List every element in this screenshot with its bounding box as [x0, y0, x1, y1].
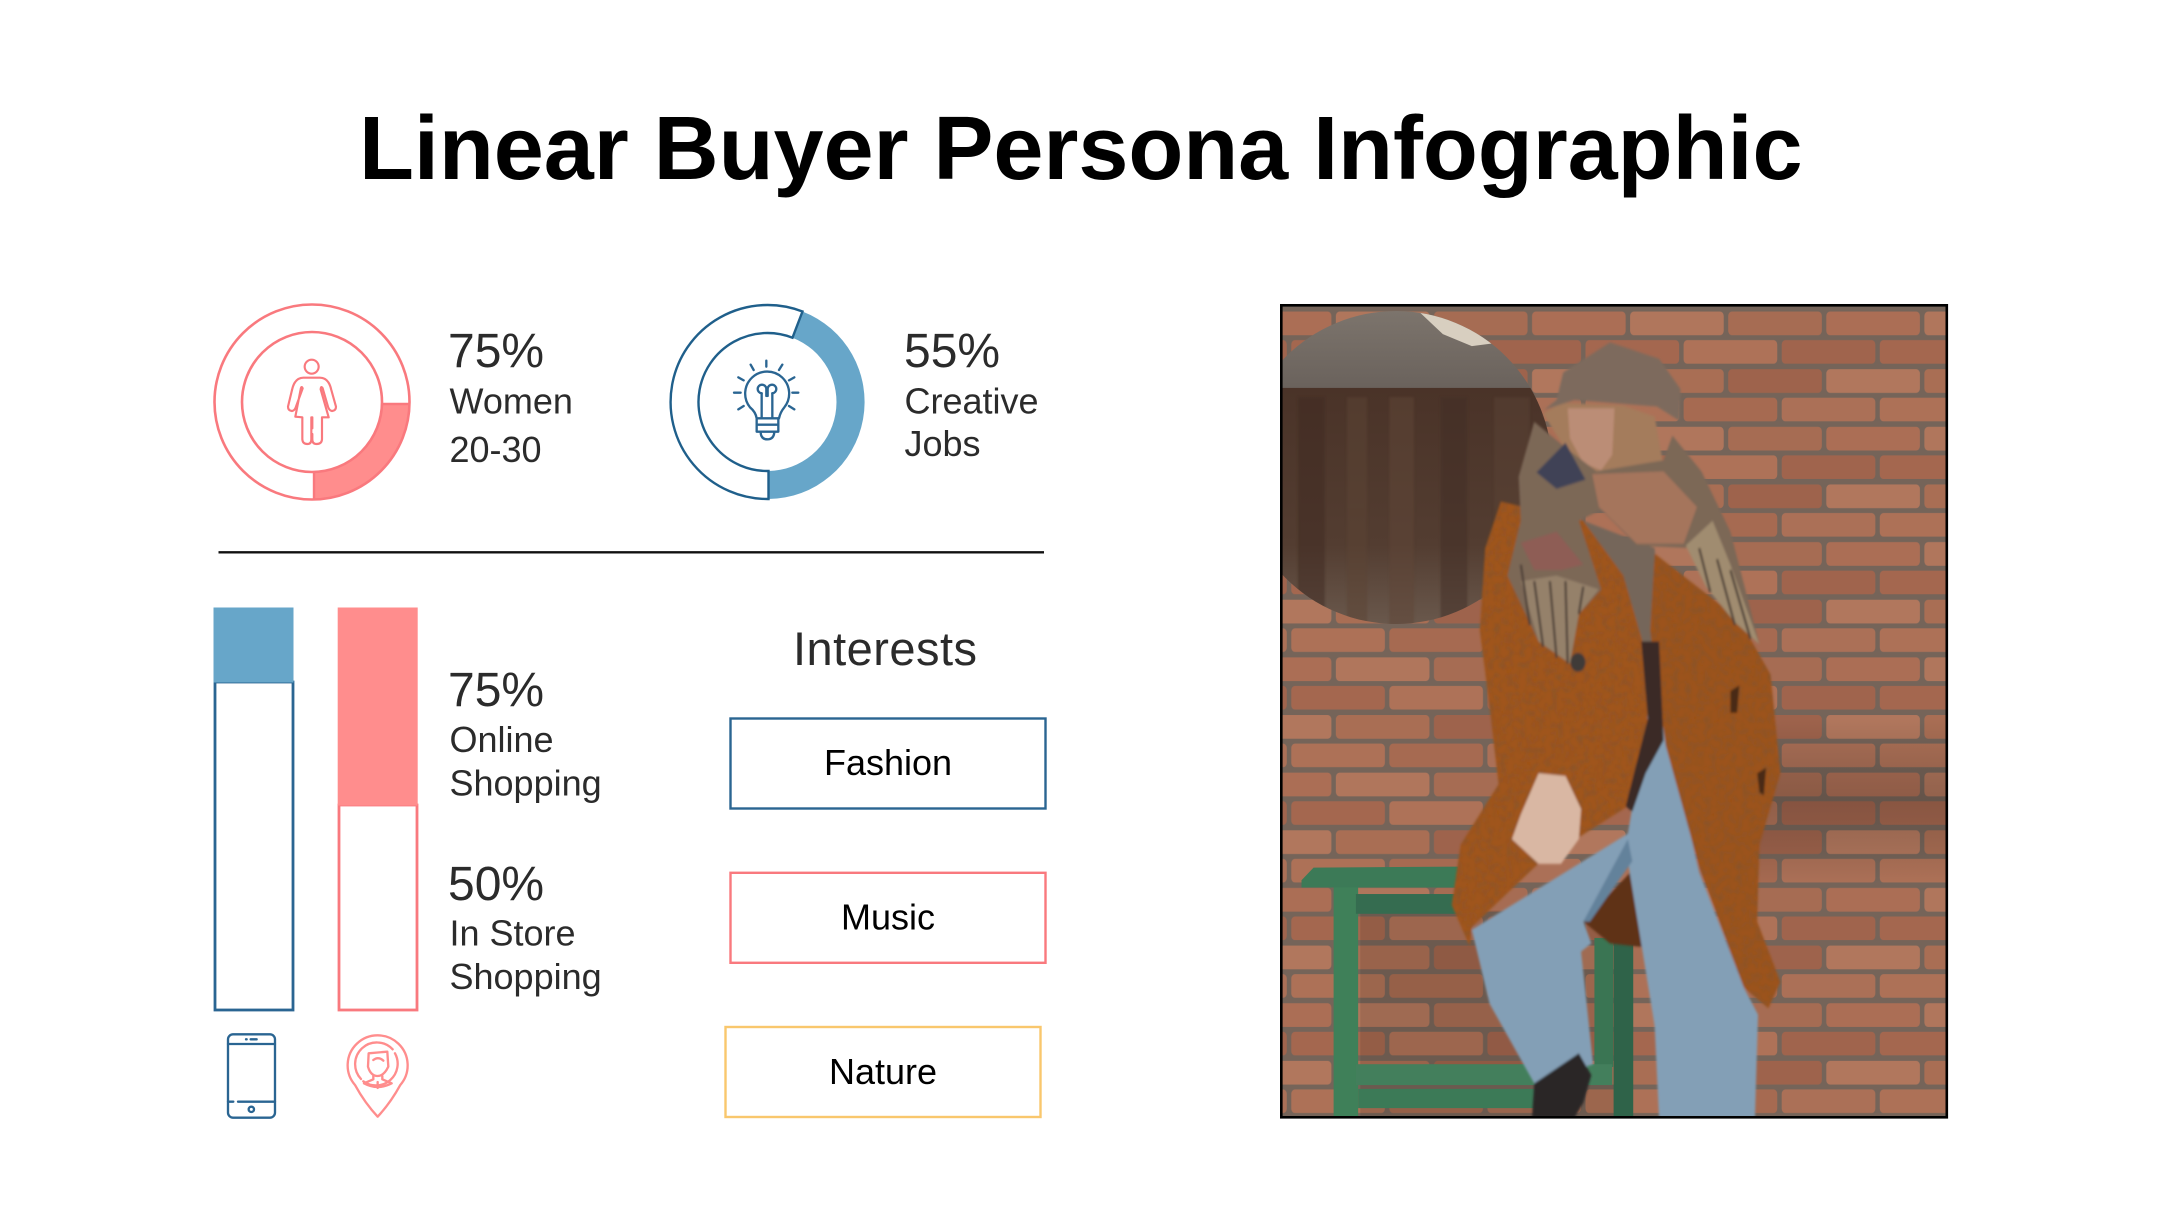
- stat text: 50% in store shopping: In Store: [450, 912, 576, 954]
- photo frame: [1281, 305, 1947, 1117]
- coat hem behind leg: [1583, 861, 1659, 949]
- button: music: [730, 873, 1046, 963]
- jeans: [1472, 713, 1758, 1118]
- sweater under layer: [1583, 521, 1664, 718]
- title: Linear Buyer Persona Infographic: [359, 99, 1802, 199]
- bar: online shopping (blue): [214, 608, 294, 1010]
- stat text: 75% women 20-30: Women: [450, 380, 573, 422]
- icon: smartphone: [228, 1034, 275, 1118]
- stat text: 55% creative jobs: 55%: [904, 325, 1000, 378]
- photo: woman in brown coat against brick wall: [1282, 306, 1946, 1116]
- hat: [1544, 342, 1680, 421]
- stat text: 55% creative jobs: Creative: [904, 380, 1039, 422]
- donut chart: women 25 percent wedge: [214, 304, 410, 500]
- stool: [1302, 867, 1633, 1118]
- icon: light bulb: [734, 361, 798, 439]
- stat text: 75% online shopping: Shopping: [450, 762, 602, 804]
- stat text: 50% in store shopping: [448, 858, 602, 997]
- stat text: 75% online shopping: Online: [450, 719, 554, 760]
- wall shadow: [1757, 718, 1949, 883]
- heading: interests: Interests: [793, 622, 977, 675]
- button: nature: Nature: [829, 1051, 937, 1092]
- donut chart: creative jobs 55 percent wedge: [671, 305, 865, 499]
- woman figure: [1452, 342, 1780, 1118]
- stat text: 55% creative jobs: [904, 325, 1039, 464]
- panel: interests: [726, 622, 1046, 1117]
- button: fashion: Fashion: [824, 742, 952, 783]
- bar chart: shopping channels: [214, 608, 418, 1010]
- hand: [1512, 773, 1581, 864]
- button: nature: [726, 1027, 1040, 1117]
- hair and face: [1543, 403, 1664, 480]
- button: fashion: [730, 718, 1046, 808]
- icon: woman: [288, 360, 336, 444]
- panel: creative jobs donut stat: [671, 305, 1039, 499]
- stat text: 50% in store shopping: Shopping: [450, 956, 602, 997]
- bar: in store shopping (pink): [338, 608, 418, 1010]
- stat text: 75% online shopping: 75%: [448, 664, 544, 717]
- panel: women donut stat: [214, 304, 573, 500]
- button: music: Music: [841, 896, 935, 938]
- boot: [1532, 1053, 1591, 1118]
- stat text: 75% online shopping: [448, 664, 602, 804]
- stat text: 55% creative jobs: Jobs: [904, 423, 981, 464]
- stat text: 75% women 20-30: 20-30: [450, 429, 542, 470]
- round mirror: [1282, 311, 1548, 624]
- stat text: 75% women 20-30: [448, 325, 573, 470]
- stat text: 75% women 20-30: 75%: [448, 325, 544, 378]
- stat text: 50% in store shopping: 50%: [448, 858, 544, 911]
- icon: location pin with person: [348, 1035, 408, 1117]
- coat: [1452, 502, 1780, 1008]
- scarf: [1507, 422, 1759, 663]
- brick wall: [1281, 305, 1948, 1118]
